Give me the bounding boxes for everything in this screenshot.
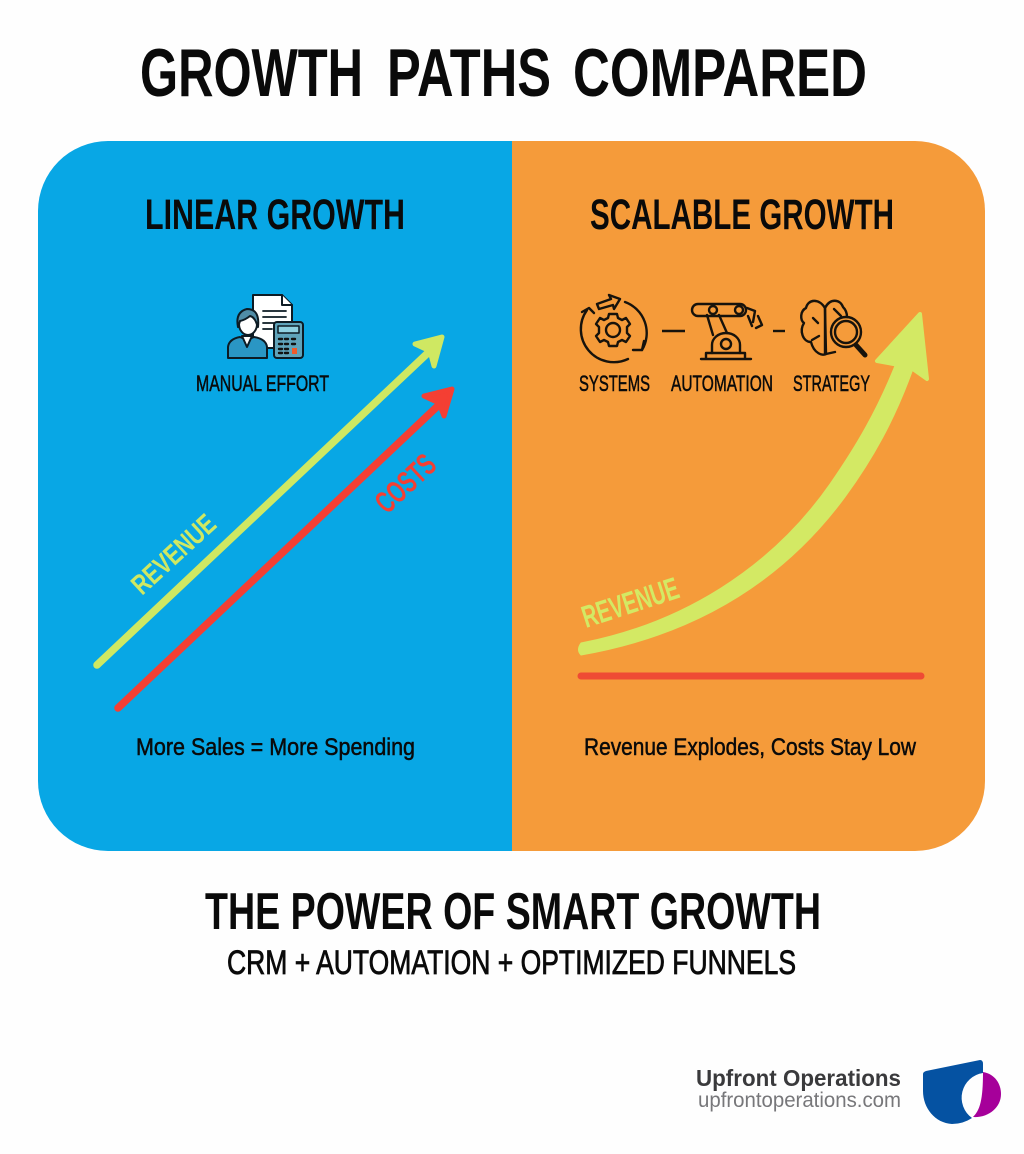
icon: logo (923, 1060, 1001, 1124)
label: revenue: REVENUE (577, 570, 683, 635)
label: automation: AUTOMATION (671, 371, 773, 396)
caption: linear growth: More Sales = More Spending (136, 734, 415, 761)
icon: systems gear (581, 295, 647, 362)
heading: linear growth: LINEAR GROWTH (145, 191, 405, 239)
label: manual effort: MANUAL EFFORT (196, 371, 329, 396)
label: costs: COSTS (368, 447, 443, 520)
connector dash (773, 330, 785, 332)
icon: robot arm (692, 304, 762, 359)
line: costs (581, 672, 921, 680)
label: revenue: REVENUE (125, 508, 222, 600)
tagline: CRM + AUTOMATION + OPTIMIZED FUNNELS (227, 944, 796, 982)
arrow: revenue (97, 337, 442, 665)
connector dash (662, 330, 685, 332)
label: systems: SYSTEMS (579, 371, 650, 396)
arrow: revenue curve (578, 314, 927, 655)
title: GROWTH (140, 35, 363, 111)
icon: person with document and calculator (228, 295, 303, 358)
arrow: costs (118, 389, 452, 708)
title: PATHS (387, 35, 551, 111)
title: COMPARED (573, 35, 867, 111)
caption: scalable growth: Revenue Explodes, Costs Stay Low (584, 734, 917, 761)
brand name: Upfront Operations (696, 1065, 901, 1091)
brand url: upfrontoperations.com (698, 1089, 901, 1112)
icon: brain with magnifier (801, 301, 865, 355)
label: strategy: STRATEGY (793, 371, 870, 396)
panel: scalable growth (512, 141, 985, 851)
title (140, 35, 867, 111)
heading: scalable growth: SCALABLE GROWTH (590, 191, 894, 239)
panel: linear growth (38, 141, 512, 851)
